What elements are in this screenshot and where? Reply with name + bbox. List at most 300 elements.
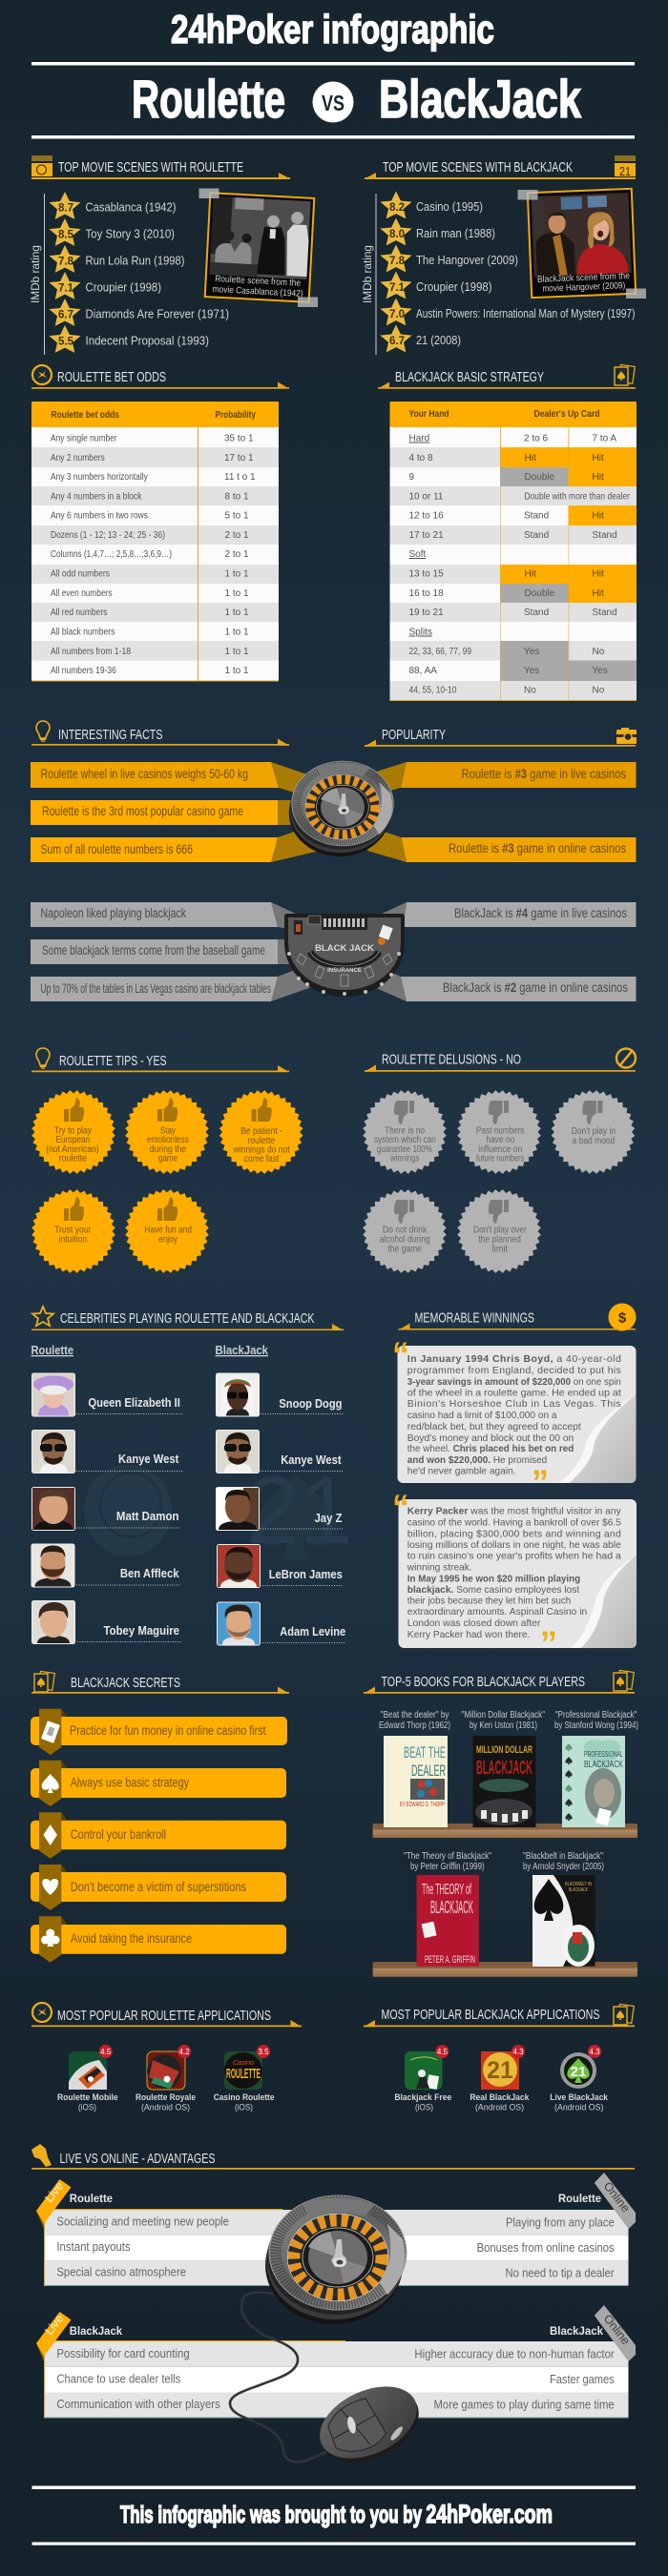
heading: roulette tips yes [31,1048,289,1072]
celebrity: Snoop Dogg [216,1373,344,1417]
panel: roulette facts bars with wheel: Roulette wheel in live casinos weighs 50-60 kg [40,767,248,781]
table: blackjack basic strategy: Stand [524,608,549,618]
badge: bad mood [552,1090,635,1174]
book: Beat the Dealer: DEALER [411,1762,446,1780]
chart: IMDb rating list, roulette movies: 8.5 [58,229,74,240]
books: second shelf: "Blackbelt in Blackjack" [523,1850,603,1862]
celebrity: Tobey Maguire: Tobey Maguire [103,1624,179,1638]
heading: live vs online advantages: LIVE VS ONLINE - ADVANTAGES [59,2152,216,2167]
panel: blackjack facts bars with table: Some blackjack terms come from the baseball game [42,943,265,958]
celebrity: Matt Damon [31,1487,181,1531]
table: blackjack basic strategy: 7 to A [592,433,616,444]
table: roulette bet odds: Any 2 numbers [51,453,105,464]
table: blackjack live vs online: Online [601,2312,633,2347]
table: roulette bet odds: 35 to 1 [224,433,254,444]
table: blackjack live vs online: Chance to use dealer tells [56,2372,180,2385]
app: Blackjack Free: (iOS) [415,2102,433,2113]
subheading: blackjack: BlackJack [216,1343,269,1357]
secret 4: Don't become a victim of superstitions [71,1880,246,1894]
book: Professional Blackjack: BLACKJACK [584,1760,623,1770]
table: blackjack basic strategy: Double [525,588,555,599]
books: second shelf: "The Theory of Blackjack" [404,1850,491,1862]
app: Real BlackJack: 4.3 [512,2048,524,2056]
chart: IMDb rating list, roulette movies: 5.5 [58,336,74,347]
badge: try to play European [31,1090,115,1174]
app: Roulette Mobile: (iOS) [78,2102,96,2113]
heading: top-5 books [364,1670,635,1694]
table: roulette bet odds: 11 t o 1 [224,472,256,483]
title: 24hPoker infographic: 24hPoker infographic [171,7,494,52]
badge: past numbers: influence on [478,1144,522,1155]
heading: top movie scenes with blackjack: 21 [619,164,631,178]
table: blackjack basic strategy: 17 to 21 [408,530,444,541]
app: Roulette Mobile: Roulette Mobile [57,2092,118,2103]
heading: celebrities playing roulette and blackjack [31,1307,344,1330]
celebrity: LeBron James: LeBron James [269,1568,343,1581]
celebrity: Jay Z [216,1487,344,1531]
table: blackjack basic strategy: 22, 33, 66, 77, 99 [408,647,471,657]
chart: IMDb rating list, blackjack movies: 6.7 [389,336,405,347]
celebrity: Adam Levine [217,1602,345,1646]
chart: IMDb rating list, roulette movies: 6.7 [58,309,73,320]
celebrity: Snoop Dogg: Snoop Dogg [279,1397,342,1411]
celebrity: LeBron James [217,1544,344,1588]
table: roulette bet odds: Any 6 numbers in two rows [51,511,148,521]
blackjack table illustration [284,914,405,997]
table: roulette bet odds: Any 4 numbers in a block [51,492,142,502]
callout: Chris Boyd story [392,1335,636,1501]
callout: Chris Boyd story: ” [532,1463,549,1501]
table: roulette bet odds: 1 to 1 [225,647,249,657]
badge: try to play European: roulette [59,1154,87,1164]
books: first shelf: by Ken Uston (1981) [470,1720,537,1731]
badge: try to play European: Try to play [54,1125,92,1137]
chart: IMDb rating list, blackjack movies: IMDb rating [363,245,374,303]
table: roulette bet odds: 17 to 1 [224,453,254,464]
badge: no system: guarantee 100% [377,1144,432,1155]
secret 1: Practice for fun money in online casino first [70,1723,266,1738]
app: Casino Roulette: (iOS) [235,2102,253,2113]
table: blackjack basic strategy [389,402,637,701]
badge: planned limit: limit [492,1244,508,1255]
books: first shelf [373,1709,638,1838]
app: Casino Roulette: Casino [233,2060,254,2067]
book: Beat the Dealer [384,1736,448,1827]
secret 1 [31,1709,287,1755]
book: Million Dollar Blackjack [473,1736,536,1827]
badge: try to play European: (not American) [46,1144,99,1155]
decorative watermark: wheel and 21: 21 [246,1457,352,1564]
badge: planned limit: Don't play over [473,1225,527,1236]
chart: IMDb rating list, blackjack movies: 7.0 [389,309,405,320]
table: roulette live vs online: Roulette [70,2192,113,2205]
callout: Kerry Packer story: ” [540,1623,557,1663]
photo: Casablanca roulette scene: Roulette scene from the [215,274,301,289]
table: blackjack basic strategy: 4 to 8 [408,453,433,464]
celebrity: Matt Damon: Matt Damon [116,1510,179,1523]
subheading: roulette: Roulette [31,1343,73,1357]
heading: popularity: POPULARITY [382,728,446,743]
table: roulette live vs online: Playing from any place [506,2215,615,2229]
books: second shelf [373,1850,637,1977]
secret 3: Control your bankroll [71,1827,166,1842]
photo: Hangover blackjack scene [528,189,636,298]
celebrity: Kanye West: Kanye West [118,1453,179,1466]
chart: IMDb rating list, blackjack movies: Croupier (1998) [416,280,492,294]
heading: most popular roulette applications [31,2003,302,2027]
heading: memorable winnings [399,1303,636,1331]
table: blackjack basic strategy: Stand [592,608,617,618]
table: blackjack basic strategy: Hit [525,568,536,580]
table: roulette bet odds: Probability [216,410,256,421]
table: roulette live vs online: Instant payouts [56,2240,131,2254]
illustration: computer mouse [308,2372,430,2477]
badge: no system: There is no [385,1125,425,1137]
chart: IMDb rating list, roulette movies: IMDb rating [31,245,42,303]
table: roulette bet odds: Columns (1,4,7…; 2,5,8…;3,6,9…) [51,549,172,560]
table: roulette bet odds: 2 to 1 [225,549,249,560]
badge: no system: winnings [389,1154,419,1164]
table: roulette bet odds: 1 to 1 [225,608,249,618]
badge: be patient: winnings do not [233,1144,290,1156]
callout: Kerry Packer story: losing millions of dollars in one night, he was able [407,1539,621,1551]
chart: IMDb rating list, roulette movies: Casablanca (1942) [86,200,176,214]
chart: IMDb rating list, roulette movies: Run Lola Run (1998) [86,254,185,267]
badges: roulette tips [31,1090,303,1273]
table: blackjack basic strategy: Hit [525,453,536,464]
badge: past numbers: future numbers [476,1154,524,1164]
app: Casino Roulette: ROULETTE [226,2066,261,2082]
table: roulette bet odds: All black numbers [51,628,115,637]
table: roulette bet odds: All numbers 19-36 [51,666,116,676]
callout: Chris Boyd story: red/black bet, but they agreed to accept [407,1421,581,1432]
callout: Chris Boyd story: 3-year savings in amount of $220,000 on one spin [407,1376,621,1388]
table: blackjack basic strategy: 13 to 15 [408,568,444,580]
table: blackjack live vs online: Higher accuracy due to non-human factor [414,2348,615,2361]
heading: top movie scenes with roulette [31,155,290,179]
panel: blackjack facts bars with table [31,902,636,1001]
blackjack table illustration: BLACK JACK [315,943,374,954]
table: roulette live vs online: Bonuses from online casinos [477,2241,615,2255]
illustration: roulette wheel [265,2195,407,2324]
callout: Kerry Packer story: Kerry Packer had won there. [407,1629,530,1640]
title: Roulette vs BlackJack: VS [322,91,344,115]
books: first shelf: Edward Thorp (1962) [379,1720,450,1731]
badge: try to play European: European [55,1135,90,1145]
app: Roulette Royale [136,2045,196,2113]
table: blackjack basic strategy: 19 to 21 [408,608,444,618]
decorative watermark: wheel and 21 [84,1457,352,1564]
table: roulette bet odds: 1 to 1 [225,588,249,599]
callout: Kerry Packer story: Kerry Packer was the most frightful visitor in any [407,1505,622,1516]
books: first shelf: by Stanford Wong (1994) [554,1720,638,1731]
table: roulette live vs online: Online [601,2179,633,2215]
title: Roulette vs BlackJack: BlackJack [379,69,582,129]
badge: no system [363,1090,447,1174]
badge: have fun: Have fun and [144,1225,192,1236]
app: Roulette Royale: Roulette Royale [136,2092,196,2103]
app: Real BlackJack [470,2045,530,2113]
table: roulette bet odds: Any 3 numbers horizontally [51,472,148,483]
table: blackjack basic strategy: Yes [524,666,539,676]
celebrity: Kanye West (blackjack) [216,1430,343,1473]
app: Live BlackJack: 21 [571,2064,586,2080]
celebrity: Kanye West [31,1430,182,1473]
heading: top movie scenes with roulette: TOP MOVIE SCENES WITH ROULETTE [58,160,243,175]
table: blackjack basic strategy: Dealer's Up Card [534,409,599,420]
celebrity: Adam Levine: Adam Levine [280,1625,345,1638]
photo: Casablanca roulette scene: movie Casablanca (1942) [212,284,303,299]
heading: top-5 books: TOP-5 BOOKS FOR BLACKJACK PLAYERS [382,1675,585,1690]
table: blackjack basic strategy: 9 [408,472,414,483]
table: blackjack live vs online: More games to play during same time [433,2399,615,2412]
secret 5 [31,1916,286,1963]
app: Live BlackJack [550,2045,609,2113]
table: blackjack basic strategy: Yes [592,666,608,676]
table: roulette bet odds: 1 to 1 [225,628,249,637]
secret 3 [31,1812,286,1859]
table: roulette bet odds: All numbers from 1-18 [51,647,131,657]
table: blackjack basic strategy: Stand [592,530,617,541]
heading: roulette delusions no: ROULETTE DELUSIONS - NO [382,1053,521,1068]
table: blackjack basic strategy: Your Hand [408,409,449,420]
panel: roulette facts bars with wheel: Sum of all roulette numbers is 666 [40,842,193,856]
table: blackjack basic strategy: Soft [408,549,427,560]
heading: roulette delusions no [365,1049,636,1072]
chart: IMDb rating list, roulette movies: Croupier (1998) [86,280,161,294]
secret 2: Always use basic strategy [71,1776,189,1790]
table: blackjack basic strategy: 10 or 11 [408,492,444,502]
table: blackjack live vs online: Live [42,2312,67,2338]
table: roulette live vs online: Socializing and meeting new people [56,2215,229,2229]
photo: Hangover blackjack scene: BlackJack scene from the [537,271,630,285]
chart: IMDb rating list, blackjack movies: 8.0 [389,229,405,240]
table: roulette bet odds: 5 to 1 [225,511,249,521]
books: first shelf: "Million Dollar Blackjack" [462,1709,545,1721]
title: Roulette vs BlackJack: Roulette [132,69,285,129]
callout: Chris Boyd story: of the wheel in a roulette game. He ended up at [407,1387,621,1398]
table: roulette bet odds: Any single number [51,433,117,444]
badge: planned limit: the planned [478,1234,521,1246]
table: blackjack live vs online: BlackJack [70,2324,122,2338]
table: roulette bet odds: 8 to 1 [225,492,249,502]
chart: IMDb rating list, blackjack movies: 7.8 [389,256,406,267]
heading: interesting facts [31,721,289,746]
chart: IMDb rating list, blackjack movies: The Hangover (2009) [416,254,518,267]
callout: Kerry Packer story: London was closed down after [407,1618,541,1629]
badge: stay emotionless: game [158,1154,177,1164]
heading: blackjack basic strategy: BLACKJACK BASIC STRATEGY [395,370,544,385]
photo: Casablanca roulette scene [205,193,314,302]
table: roulette bet odds: Dozens (1 - 12; 13 - 24; 25 - 36) [51,530,165,541]
badge: do not drink: alcohol during [380,1234,429,1246]
books: second shelf: by Peter Griffin (1999) [410,1861,485,1872]
celebrity: Ben Affleck [31,1543,181,1587]
illustration: mouse cable [230,2293,337,2463]
badge: stay emotionless: during the [150,1144,186,1155]
badge: planned limit [457,1189,541,1273]
app: Live BlackJack: Live BlackJack [550,2092,609,2103]
secret 4 [31,1865,286,1910]
callout: Kerry Packer story: winning streak. [407,1562,472,1574]
badge: have fun: enjoy [158,1234,177,1246]
table: blackjack basic strategy: 88, AA [408,666,437,676]
table: roulette bet odds: All red numbers [51,608,107,618]
badge: past numbers [457,1090,541,1174]
heading: popularity [365,728,637,747]
chart: IMDb rating list, blackjack movies: 21 (2008) [416,334,461,347]
chart: IMDb rating list, roulette movies: Diamonds Are Forever (1971) [86,307,229,320]
heading: top movie scenes with blackjack: TOP MOVIE SCENES WITH BLACKJACK [383,160,573,175]
table: blackjack basic strategy: Hit [592,568,604,580]
heading: memorable winnings: $ [618,1310,627,1326]
table: blackjack basic strategy: 12 to 16 [408,511,444,521]
badge: trust your intuition: Trust your [54,1225,92,1236]
table: roulette bet odds: 1 to 1 [225,666,249,676]
callout: Chris Boyd story: and won $220,000. He promised [407,1454,547,1466]
app: Real BlackJack: Real BlackJack [470,2092,530,2103]
table: blackjack basic strategy: Hit [592,511,604,521]
badge: no system: system which can [374,1135,436,1145]
book: The Theory of Blackjack: The THEORY of [422,1882,471,1898]
celebrity: Kanye West (blackjack): Kanye West [281,1453,342,1467]
app: Live BlackJack: 4.3 [589,2048,600,2056]
blackjack table illustration: INSURANCE [327,968,362,974]
decorative tape, right photo [517,190,646,299]
list: blackjack secrets [31,1709,287,1963]
badge: stay emotionless: emotionless [147,1135,189,1145]
badge: stay emotionless: Stay [160,1125,176,1137]
secret 2 [31,1761,286,1806]
badge: be patient: come fast [244,1154,280,1164]
badge: be patient [219,1090,303,1174]
panel: blackjack facts bars with table: BlackJack is #4 game in live casinos [454,906,627,920]
app: Casino Roulette: 3.5 [258,2048,269,2056]
books: first shelf: "Beat the dealer" by [381,1709,449,1721]
table: roulette live vs online: No need to tip a dealer [506,2266,615,2279]
callout: Chris Boyd story: programmer from England, decided to put his [407,1365,621,1376]
celebrity: Queen Elizabeth II: Queen Elizabeth II [88,1396,180,1410]
callout: Chris Boyd story: the wheel. Chris placed his bet on red [407,1443,574,1454]
panel: blackjack facts bars with table: Up to 70% of the tables in Las Vegas casino are blackjack tables [40,981,271,996]
table: blackjack basic strategy: Stand [524,530,549,541]
heading: roulette tips yes: ROULETTE TIPS - YES [59,1054,166,1069]
book: Million Dollar Blackjack: MILLION DOLLAR [476,1744,532,1756]
heading: roulette bet odds [31,365,289,389]
callout: Kerry Packer story: extraordinary amounts. Aspinall Casino in [407,1606,587,1618]
celebrity: Jay Z: Jay Z [315,1512,343,1525]
callout: Kerry Packer story: blackjack. Some casino employees lost [407,1584,579,1596]
book: Blackbelt in Blackjack [532,1875,595,1967]
chart: IMDb rating list, roulette movies: Toy Story 3 (2010) [86,227,175,240]
panel: roulette facts bars with wheel [31,761,636,862]
badge: bad mood: a bad mood [573,1136,615,1146]
callout: Kerry Packer story: their jobs because they let him bet such [407,1595,571,1606]
heading: most popular roulette applications: MOST POPULAR ROULETTE APPLICATIONS [57,2009,271,2024]
celebrity: Tobey Maguire [31,1600,181,1644]
panel: blackjack facts bars with table: BlackJack is #2 game in online casinos [443,980,628,995]
badge: trust your intuition: intuition [59,1234,87,1246]
app: Roulette Mobile [57,2045,118,2113]
badge: do not drink: Do not drink [383,1225,428,1236]
book: Professional Blackjack [562,1736,625,1827]
table: blackjack basic strategy: Hit [592,588,604,599]
badge: trust your intuition [31,1189,115,1273]
table: blackjack live vs online [36,2305,636,2419]
table: roulette bet odds: Roulette bet odds [52,410,119,421]
app: Roulette Royale: (Android OS) [141,2102,190,2113]
table: blackjack basic strategy: Stand [524,511,549,521]
callout: Kerry Packer story: In May 1995 he won $20 million playing [407,1574,580,1585]
heading: interesting facts: INTERESTING FACTS [58,728,162,743]
book: Million Dollar Blackjack: BLACKJACK [476,1758,532,1779]
table: blackjack live vs online: Faster games [550,2373,615,2386]
callout: Kerry Packer story [392,1488,637,1663]
title: Roulette vs BlackJack [132,69,582,129]
callout: Chris Boyd story: In January 1994 Chris Boyd, a 40-year-old [407,1353,621,1365]
heading: blackjack secrets: BLACKJACK SECRETS [71,1676,180,1691]
table: blackjack basic strategy: Hit [592,472,604,483]
callout: Kerry Packer story: billion, placing $300,000 bets and winning and [407,1528,621,1539]
badge: past numbers: Past numbers [476,1125,524,1137]
callout: Chris Boyd story: “ [392,1335,409,1373]
panel: roulette facts bars with wheel: Roulette is the 3rd most popular casino game [42,804,243,818]
app: Live BlackJack: (Android OS) [554,2102,603,2113]
table: roulette bet odds: 2 to 1 [225,530,249,541]
callout: Kerry Packer story: “ [392,1488,409,1526]
chart: IMDb rating list, roulette movies: 7.8 [58,256,74,267]
panel: blackjack facts bars with table: Napoleon liked playing blackjack [40,906,186,920]
chart: IMDb rating list, roulette movies: 8.7 [58,202,73,214]
celebrity: Ben Affleck: Ben Affleck [120,1567,179,1580]
table: blackjack basic strategy: 44, 55, 10-10 [408,685,457,696]
footer: credit line: This infographic was brought to you by [120,2502,422,2528]
table: roulette bet odds: All odd numbers [51,568,110,580]
app: Blackjack Free [394,2045,451,2113]
app: Real BlackJack: 21 [487,2057,513,2084]
chart: IMDb rating list, roulette movies: 7.1 [58,282,74,294]
panel: roulette facts bars with wheel: Roulette is #3 game in live casinos [462,767,626,781]
chart: IMDb rating list, blackjack movies [363,191,636,355]
app: Real BlackJack: (Android OS) [475,2102,524,2113]
badge: do not drink: the game [387,1244,422,1255]
chart: IMDb rating list, blackjack movies: Rain man (1988) [416,227,495,240]
table: blackjack live vs online: Communication with other players [56,2398,220,2411]
table: blackjack basic strategy: Splits [408,628,432,637]
celebrity: Queen Elizabeth II [31,1373,182,1417]
table: roulette live vs online: Roulette [558,2192,601,2205]
books: first shelf: "Professional Blackjack" [555,1709,637,1721]
callout: Chris Boyd story: he'd never gamble again. [407,1465,516,1476]
table: roulette live vs online: Live [42,2179,67,2205]
heading: celebrities playing roulette and blackjack: CELEBRITIES PLAYING ROULETTE AND BLACKJACK [60,1311,315,1327]
table: blackjack basic strategy: No [592,647,605,657]
photo: Hangover blackjack scene: movie Hangover (2009) [542,280,626,295]
badge: stay emotionless [125,1090,209,1174]
heading: blackjack basic strategy [378,364,636,389]
app: Blackjack Free: Blackjack Free [394,2092,451,2103]
app: Roulette Royale: 4.2 [178,2048,190,2056]
table: blackjack basic strategy: No [524,685,536,696]
callout: Chris Boyd story: Boyd's money and block out the 00 on [407,1432,574,1444]
chart: IMDb rating list, roulette movies: Indecent Proposal (1993) [86,334,209,347]
callout: Kerry Packer story: casino of the world. Having a bankroll of over $6.5 [407,1516,621,1528]
table: roulette bet odds [31,402,279,681]
secret 5: Avoid taking the insurance [71,1931,192,1946]
callout: Chris Boyd story: casino had a limit of $100,000 on a [407,1410,557,1421]
book: Blackbelt in Blackjack: BLACKJACK [569,1887,588,1893]
app: Blackjack Free: 4.5 [437,2048,449,2056]
